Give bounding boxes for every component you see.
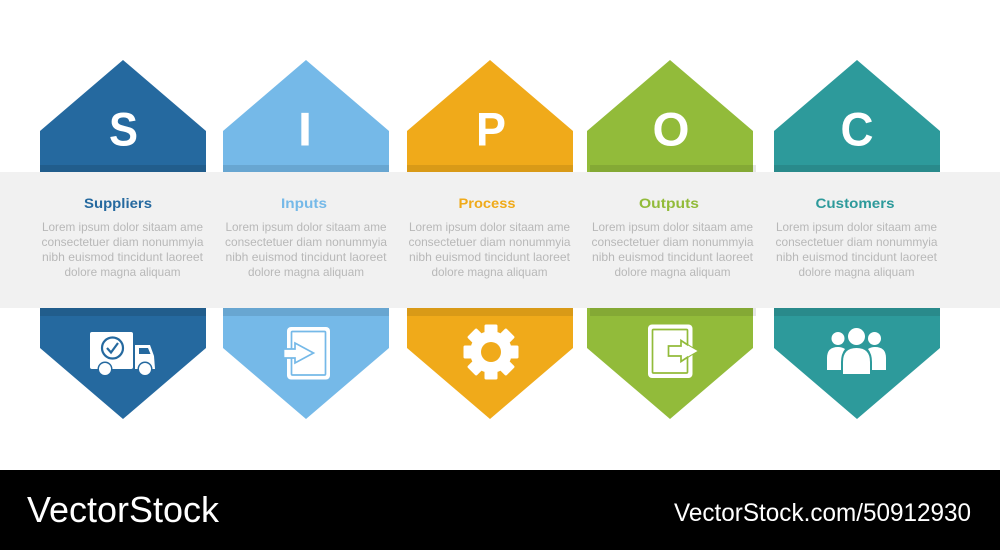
icon: delivery truck with check [90, 332, 155, 376]
text block: suppliers [42, 220, 204, 279]
footer bar [0, 470, 1000, 550]
panel: outputs bottom pentagon [587, 308, 756, 419]
heading: Process: Process [458, 196, 516, 211]
text block: inputs [225, 220, 387, 279]
icon: group of people [827, 328, 886, 374]
panel: inputs bottom pentagon [223, 308, 389, 419]
text block: process: dolore magna aliquam [432, 265, 548, 279]
footer logo: VectorStock: VectorStock [27, 489, 220, 530]
panel: suppliers top pentagon [40, 60, 206, 172]
text block: suppliers: consectetuer diam nonummyia [42, 235, 204, 249]
panel: grey text band [0, 172, 1000, 308]
text block: inputs: dolore magna aliquam [248, 265, 364, 279]
panel: process bottom pentagon [407, 308, 573, 419]
text block: suppliers: nibh euismod tincidunt laoreet [42, 250, 204, 264]
text block: process [408, 220, 571, 279]
text block: suppliers: dolore magna aliquam [64, 265, 180, 279]
letter S: S [109, 102, 138, 156]
panel: inputs top pentagon [223, 60, 389, 172]
letter P: P [476, 102, 506, 156]
heading: Suppliers: Suppliers [84, 196, 152, 211]
icon: output door with arrow [648, 324, 698, 378]
icon: input door with arrow [284, 327, 330, 380]
text block: customers: Lorem ipsum dolor sitaam ame [776, 220, 937, 234]
text block: inputs: Lorem ipsum dolor sitaam ame [226, 220, 387, 234]
heading: Customers: Customers [816, 196, 894, 211]
letter C: C [840, 102, 874, 156]
text block: suppliers: Lorem ipsum dolor sitaam ame [42, 220, 203, 234]
text block: outputs: consectetuer diam nonummyia [592, 235, 754, 249]
panel: customers top pentagon [774, 60, 940, 172]
icon: gear [464, 324, 518, 380]
text block: inputs: nibh euismod tincidunt laoreet [226, 250, 387, 264]
text block: outputs: Lorem ipsum dolor sitaam ame [592, 220, 753, 234]
text block: inputs: consectetuer diam nonummyia [225, 235, 387, 249]
text block: outputs [592, 220, 754, 279]
panel: customers bottom pentagon [774, 308, 940, 419]
text block: outputs: dolore magna aliquam [614, 265, 730, 279]
text block: customers: dolore magna aliquam [798, 265, 914, 279]
text block: customers: consectetuer diam nonummyia [776, 235, 938, 249]
panel: suppliers bottom pentagon [40, 308, 206, 419]
text block: outputs: nibh euismod tincidunt laoreet [592, 250, 754, 264]
text block: customers [776, 220, 938, 279]
letter I: I [298, 102, 312, 156]
text block: process: Lorem ipsum dolor sitaam ame [409, 220, 570, 234]
heading: Outputs: Outputs [639, 196, 699, 211]
text block: customers: nibh euismod tincidunt laoreet [776, 250, 938, 264]
panel: outputs top pentagon [587, 60, 756, 172]
heading: Inputs: Inputs [281, 196, 327, 211]
panel: process top pentagon [407, 60, 573, 172]
letter O: O [652, 102, 690, 156]
text block: process: nibh euismod tincidunt laoreet [409, 250, 571, 264]
footer url: VectorStock.com/50912930 [674, 499, 971, 527]
text block: process: consectetuer diam nonummyia [408, 235, 571, 249]
